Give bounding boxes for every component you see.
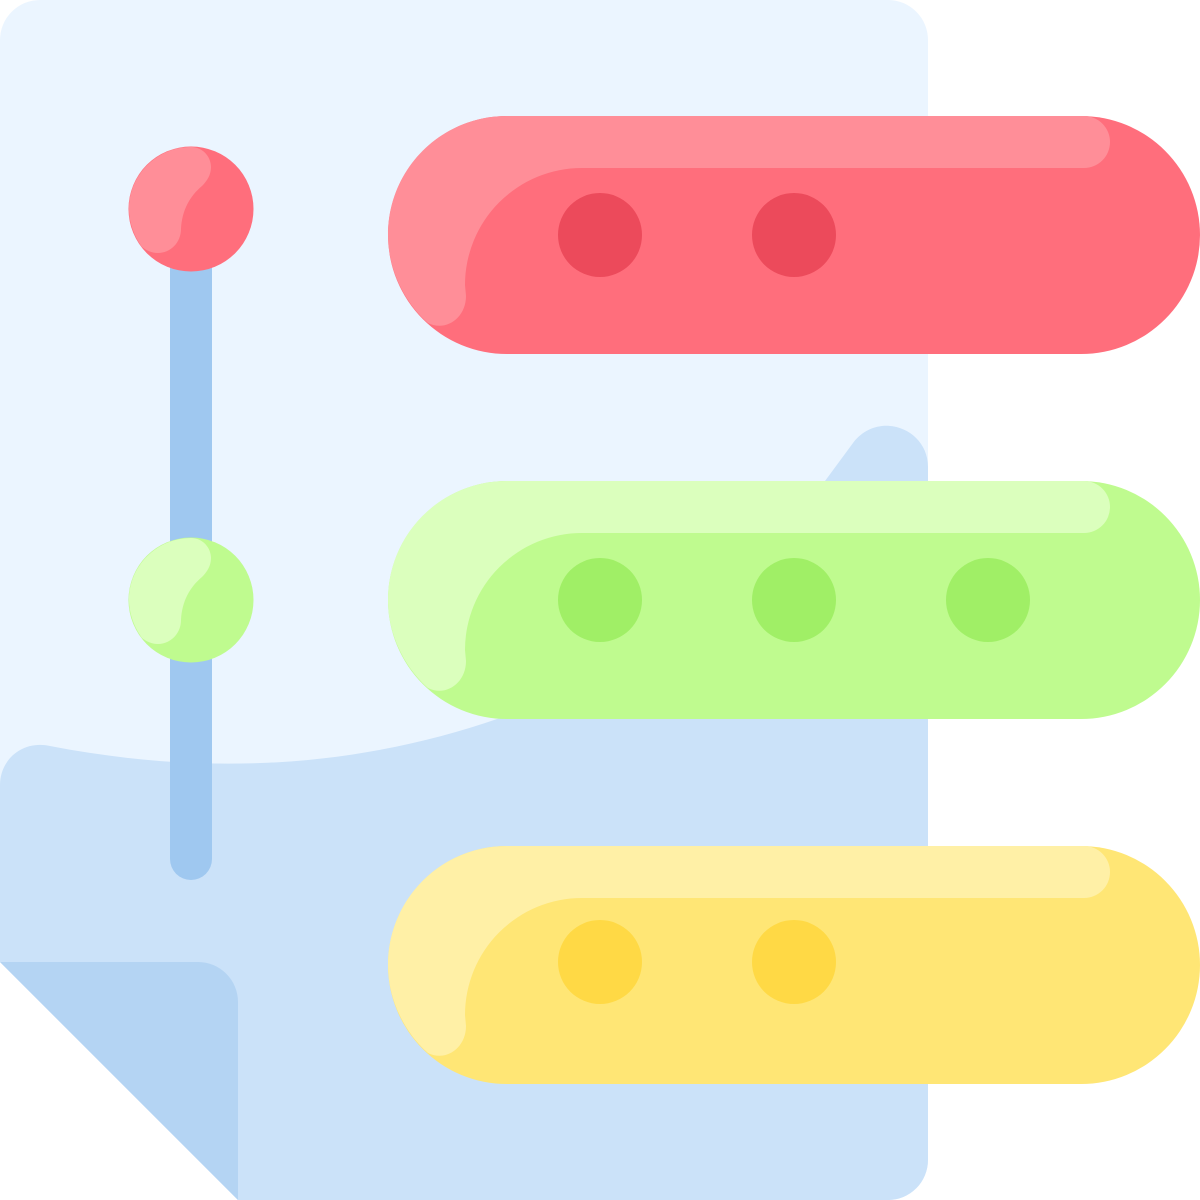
- icon: folded corner: [0, 962, 238, 1200]
- pill highlight: [388, 481, 1110, 691]
- panel: green pill: [388, 481, 1200, 719]
- dot: [752, 558, 836, 642]
- timeline node: red: [128, 146, 254, 272]
- dot: [558, 193, 642, 277]
- pill highlight: [388, 116, 1110, 326]
- timeline bar: [170, 250, 212, 880]
- dot: [946, 558, 1030, 642]
- panel: document shaded area: [0, 426, 928, 1200]
- dot: [752, 920, 836, 1004]
- panel: red pill: [388, 116, 1200, 354]
- dot: [558, 558, 642, 642]
- pill highlight: [388, 846, 1110, 1056]
- panel: document sheet: [0, 0, 928, 1200]
- timeline node: green: [128, 538, 254, 662]
- panel: yellow pill: [388, 846, 1200, 1084]
- dot: [558, 920, 642, 1004]
- dot: [752, 193, 836, 277]
